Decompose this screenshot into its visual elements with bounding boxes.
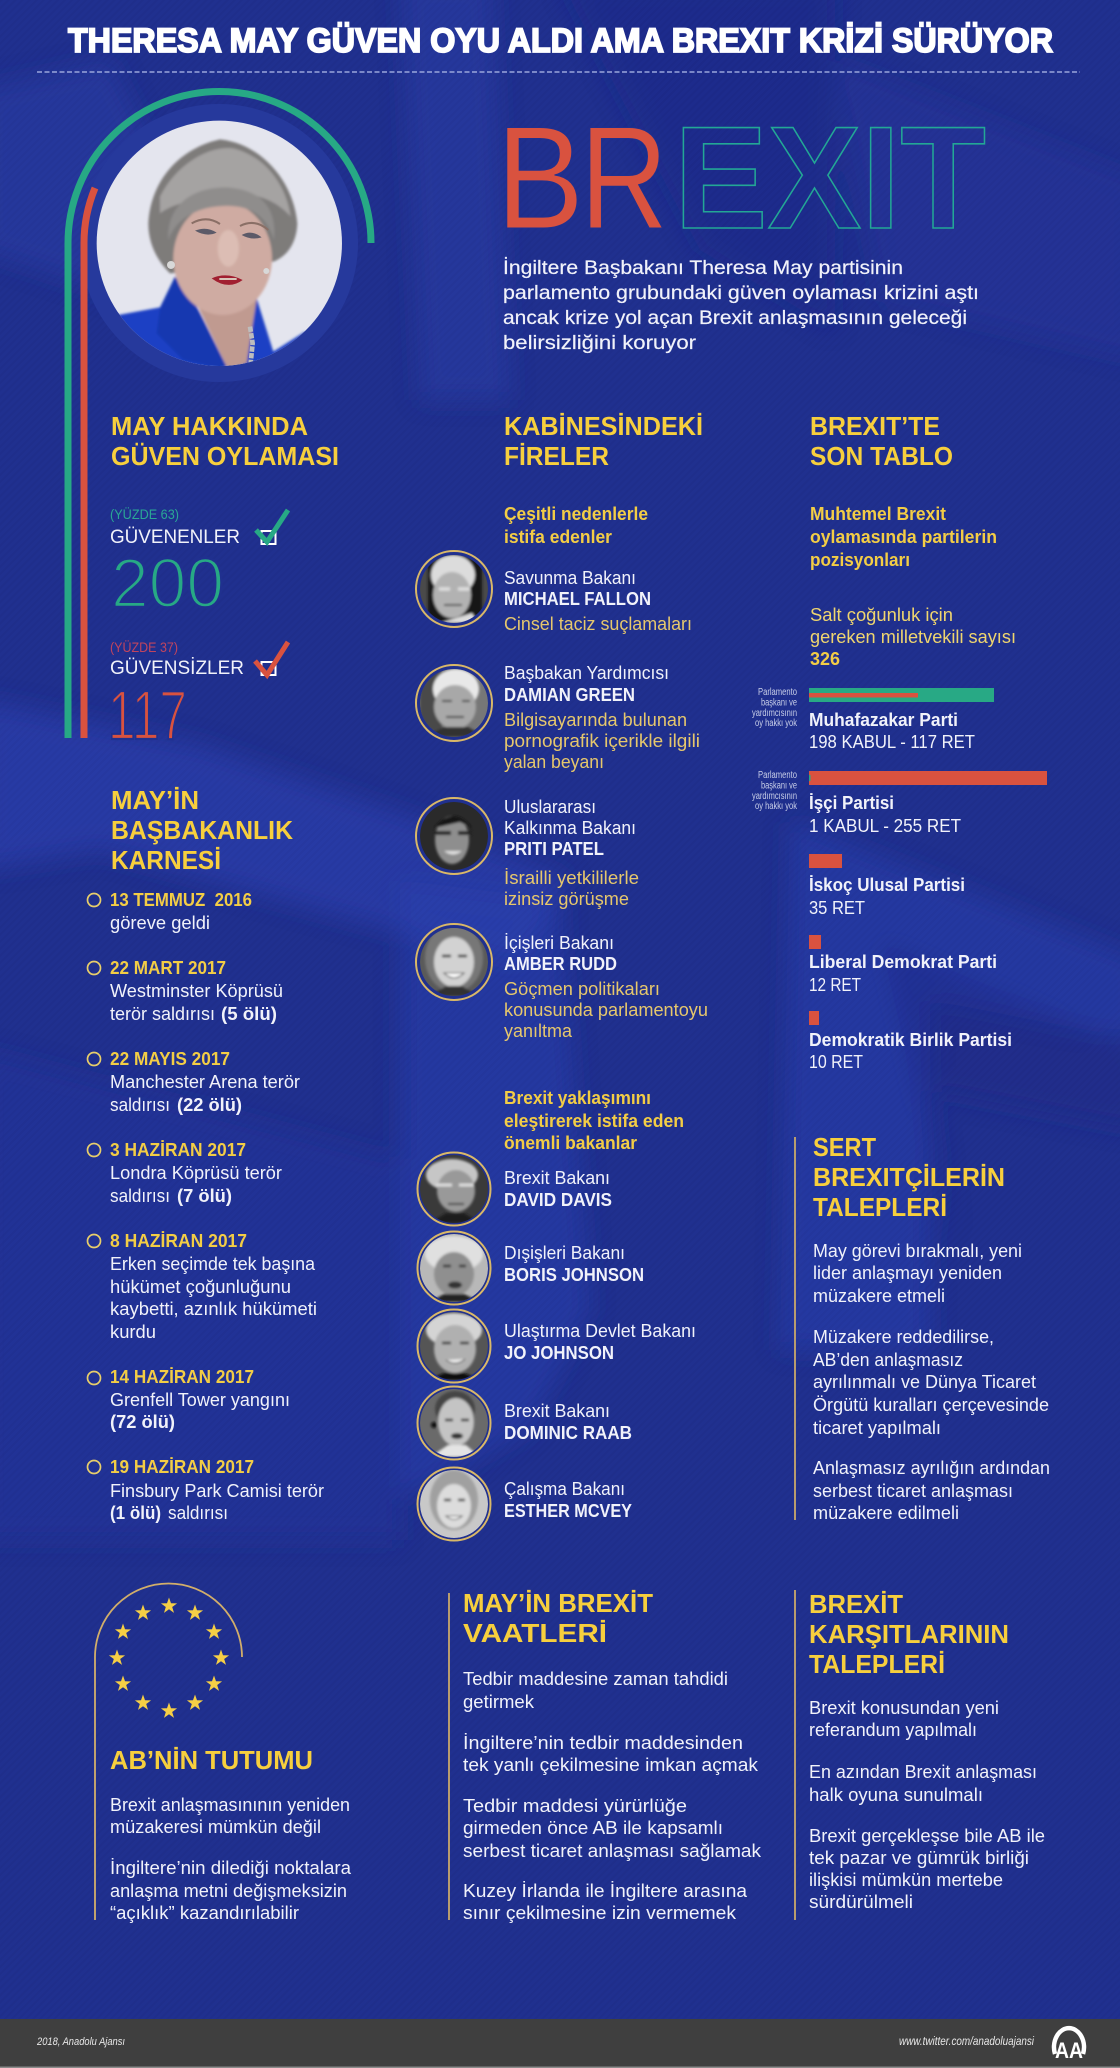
panel: Sert Brexitçilerin talepleri: Müzakere reddedilirse,: [813, 1326, 994, 1347]
panel: May'in Brexit vaatleri: getirmek: [463, 1691, 535, 1712]
timeline: 3 HAZİRAN 2017: [110, 1140, 246, 1160]
footer: 2018, Anadolu Ajansı: [36, 2036, 125, 2048]
text: Dominic Raab: [504, 1400, 632, 1443]
heading: May hakkında güven oylaması: MAY HAKKINDA: [111, 411, 308, 441]
subheading: çeşitli nedenlerle: Çeşitli nedenlerle: [504, 504, 648, 524]
panel: May'in Brexit vaatleri: tek yanlı çekilmesine imkan açmak: [463, 1754, 759, 1775]
panel: Sert Brexitçilerin talepleri: müzakere etmeli: [813, 1285, 945, 1306]
subheading: parti pozisyonları: oylamasında partilerin: [810, 527, 997, 547]
text: Michael Fallon: [504, 567, 692, 634]
text: Priti Patel: Uluslararası: [504, 796, 596, 817]
bar chart: İşçi Partisi: [809, 771, 1047, 836]
text: Damian Green: yalan beyanı: [504, 751, 604, 772]
panel: Sert Brexitçilerin talepleri: Anlaşmasız ayrılığın ardından: [813, 1457, 1050, 1478]
icon: EU stars with arch: [95, 1584, 242, 1920]
text: Jo Johnson: [504, 1320, 696, 1363]
text: Dominic Raab: DOMINIC RAAB: [504, 1422, 632, 1443]
heading: Kabinesindeki fireler: [504, 411, 703, 471]
bar chart: Muhafazakar Parti: 198 KABUL - 117 RET: [809, 731, 975, 752]
panel: May'in Brexit vaatleri: MAY’İN BREXİT: [463, 1588, 653, 1618]
panel: AB'nin tutumu: AB’NİN TUTUMU: [110, 1745, 313, 1775]
subheading: Brexit yaklaşımını: Brexit yaklaşımını: [504, 1088, 651, 1108]
timeline: 22 MART 2017: [110, 958, 226, 978]
timeline: saldırısı: [110, 1094, 170, 1115]
subheading: parti pozisyonları: pozisyonları: [810, 550, 910, 570]
panel: Brexit karşıtlarının talepleri: ilişkisi mümkün mertebe: [809, 1869, 1003, 1890]
footer: www.twitter.com/anadoluajansi: [899, 2034, 1034, 2048]
panel: Brexit karşıtlarının talepleri: [795, 1589, 1045, 1920]
panel: Sert Brexitçilerin talepleri: ayrılınmalı ve Dünya Ticaret: [813, 1371, 1036, 1392]
icon: AA logo: AA: [1055, 2038, 1083, 2063]
portrait: Amber Rudd: [416, 924, 492, 1000]
text: Boris Johnson: [504, 1242, 644, 1285]
text: Damian Green: [504, 662, 700, 772]
bar chart: İskoç Ulusal Partisi: İskoç Ulusal Partisi: [809, 874, 965, 895]
panel: Sert Brexitçilerin talepleri: TALEPLERİ: [813, 1192, 947, 1222]
subheading: Brexit yaklaşımını: önemli bakanlar: [504, 1133, 637, 1153]
heading: Brexit'te son tablo: BREXIT’TE: [810, 411, 940, 441]
note: parlamento başkanı 2: Parlamento: [758, 770, 797, 781]
text: Priti Patel: İsrailli yetkililerle: [504, 867, 639, 888]
portrait: Michael Fallon: [416, 551, 492, 627]
panel: AB'nin tutumu: “açıklık” kazandırılabilir: [110, 1902, 299, 1923]
vote panel: güvensizler: (YÜZDE 37): [110, 638, 178, 655]
text: David Davis: Brexit Bakanı: [504, 1167, 610, 1188]
timeline: kurdu: [110, 1321, 156, 1342]
bar chart: Demokratik Birlik Partisi: 10 RET: [809, 1051, 863, 1072]
timeline: Finsbury Park Camisi terör: [110, 1480, 324, 1501]
text: Amber Rudd: AMBER RUDD: [504, 953, 617, 974]
bar chart: İskoç Ulusal Partisi: 35 RET: [809, 897, 865, 918]
timeline: (5 ölü): [221, 1003, 277, 1024]
bar chart: Demokratik Birlik Partisi: [809, 1011, 1012, 1072]
bar chart: Muhafazakar Parti: [809, 688, 994, 752]
panel: Sert Brexitçilerin talepleri: ticaret yapılmalı: [813, 1417, 941, 1438]
text: David Davis: DAVID DAVIS: [504, 1189, 612, 1210]
subheading: çeşitli nedenlerle: istifa edenler: [504, 527, 612, 547]
panel: AB'nin tutumu: [110, 1745, 352, 1923]
text: Priti Patel: Kalkınma Bakanı: [504, 817, 636, 838]
bar chart: İşçi Partisi: İşçi Partisi: [809, 792, 894, 813]
timeline: hükümet çoğunluğunu: [110, 1276, 291, 1297]
subheading: parti pozisyonları: Muhtemel Brexit: [810, 504, 946, 524]
text: Amber Rudd: İçişleri Bakanı: [504, 932, 614, 953]
subheading: Brexit yaklaşımını: [504, 1088, 684, 1153]
timeline: 13 TEMMUZ 2016: [110, 890, 252, 910]
note: parlamento başkanı 2: yardımcısının: [752, 791, 797, 802]
note: parlamento başkanı 1: yardımcısının: [752, 708, 797, 719]
timeline: Westminster Köprüsü: [110, 980, 283, 1001]
timeline: Erken seçimde tek başına: [110, 1253, 316, 1274]
panel: Brexit karşıtlarının talepleri: KARŞITLARININ: [809, 1619, 1009, 1649]
majority threshold: [810, 604, 1016, 669]
timeline: Grenfell Tower yangını: [110, 1389, 290, 1410]
panel: AB'nin tutumu: müzakeresi mümkün değil: [110, 1816, 321, 1837]
panel: Brexit karşıtlarının talepleri: sürdürülmeli: [809, 1891, 913, 1912]
timeline: Manchester Arena terör: [110, 1071, 300, 1092]
panel: May'in Brexit vaatleri: girmeden önce AB ile kapsamlı: [463, 1817, 723, 1838]
heading: May'in başbakanlık karnesi: BAŞBAKANLIK: [111, 815, 293, 845]
bar chart: Demokratik Birlik Partisi: Demokratik Birlik Partisi: [809, 1029, 1012, 1050]
timeline: göreve geldi: [110, 912, 210, 933]
timeline: 8 HAZİRAN 2017: [110, 1231, 247, 1251]
panel: Brexit karşıtlarının talepleri: En azından Brexit anlaşması: [809, 1761, 1037, 1782]
portrait: Damian Green: [416, 665, 492, 741]
bar chart: Muhafazakar Parti: Muhafazakar Parti: [809, 709, 958, 730]
bar chart: İskoç Ulusal Partisi: [809, 854, 965, 918]
heading: May'in başbakanlık karnesi: MAY’İN: [111, 785, 199, 815]
panel: Brexit karşıtlarının talepleri: halk oyuna sunulmalı: [809, 1784, 983, 1805]
panel: Brexit karşıtlarının talepleri: tek pazar ve gümrük birliği: [809, 1847, 1029, 1868]
timeline: (22 ölü): [177, 1094, 242, 1115]
decorative arcs and portrait: Theresa May: [68, 92, 371, 738]
text: Priti Patel: [504, 796, 639, 909]
text: Boris Johnson: BORIS JOHNSON: [504, 1264, 644, 1285]
panel: Sert Brexitçilerin talepleri: AB’den anlaşmasız: [813, 1349, 963, 1370]
text: Amber Rudd: [504, 932, 708, 1041]
text: Esther McVey: ESTHER MCVEY: [504, 1500, 633, 1521]
bar chart: Liberal Demokrat Parti: Liberal Demokrat Parti: [809, 951, 997, 972]
timeline: 19 HAZİRAN 2017: [110, 1457, 254, 1477]
timeline: 14 HAZİRAN 2017: [110, 1367, 254, 1387]
portrait: Jo Johnson: [418, 1310, 490, 1382]
vote panel: güvenenler: [110, 505, 288, 622]
portrait: Esther McVey: [418, 1468, 490, 1540]
panel: Sert Brexitçilerin talepleri: lider anlaşmayı yeniden: [813, 1262, 1002, 1283]
subheading: Brexit yaklaşımını: eleştirerek istifa eden: [504, 1111, 684, 1131]
text: Michael Fallon: MICHAEL FALLON: [504, 588, 651, 609]
heading: Kabinesindeki fireler: KABİNESİNDEKİ: [504, 411, 703, 441]
panel: May'in Brexit vaatleri: Tedbir maddesi yürürlüğe: [463, 1795, 687, 1816]
text: Priti Patel: izinsiz görüşme: [504, 888, 629, 909]
text: Dominic Raab: Brexit Bakanı: [504, 1400, 610, 1421]
panel: May'in Brexit vaatleri: Kuzey İrlanda ile İngiltere arasına: [463, 1880, 748, 1901]
timeline: Londra Köprüsü terör: [110, 1162, 282, 1183]
panel: May'in Brexit vaatleri: sınır çekilmesine izin vermemek: [463, 1902, 737, 1923]
timeline: (72 ölü): [110, 1411, 175, 1432]
portrait: Priti Patel: [416, 798, 492, 874]
vote panel: güvenenler: 200: [111, 544, 224, 622]
vote panel: güvensizler: [108, 638, 288, 754]
panel: AB'nin tutumu: Brexit anlaşmasınının yeniden: [110, 1794, 350, 1815]
panel: Brexit karşıtlarının talepleri: BREXİT: [809, 1589, 903, 1619]
timeline: saldırısı: [110, 1185, 170, 1206]
panel: Brexit karşıtlarının talepleri: TALEPLERİ: [809, 1649, 945, 1679]
majority threshold: Salt çoğunluk için: [810, 604, 953, 625]
panel: AB'nin tutumu: İngiltere’nin dilediği noktalara: [110, 1857, 352, 1878]
text: Damian Green: Başbakan Yardımcısı: [504, 662, 669, 683]
panel: May'in Brexit vaatleri: İngiltere’nin tedbir maddesinden: [463, 1732, 743, 1753]
panel: Sert Brexitçilerin talepleri: Örgütü kuralları çerçevesinde: [813, 1394, 1049, 1415]
timeline: (1 ölü): [110, 1502, 161, 1523]
heading: Brexit'te son tablo: SON TABLO: [810, 441, 953, 471]
timeline: 22 MAYIS 2017: [110, 1049, 230, 1069]
timeline: kaybetti, azınlık hükümeti: [110, 1298, 317, 1319]
note: parlamento başkanı 1: oy hakkı yok: [755, 718, 798, 729]
text: Esther McVey: Çalışma Bakanı: [504, 1478, 625, 1499]
timeline: terör saldırısı: [110, 1003, 215, 1024]
note: parlamento başkanı 2: [752, 770, 798, 812]
text: Michael Fallon: Cinsel taciz suçlamaları: [504, 613, 692, 634]
subheading: çeşitli nedenlerle: [504, 504, 648, 547]
title: THERESA MAY GÜVEN OYU ALDI AMA BREXIT KRİZİ SÜRÜYOR: [68, 22, 1053, 60]
timeline: saldırısı: [168, 1502, 228, 1523]
panel: Sert Brexitçilerin talepleri: BREXITÇİLERİN: [813, 1162, 1005, 1192]
heading: May'in başbakanlık karnesi: KARNESİ: [111, 845, 221, 875]
portrait: David Davis: [418, 1152, 490, 1226]
panel: Sert Brexitçilerin talepleri: May görevi bırakmalı, yeni: [813, 1240, 1022, 1261]
text: Priti Patel: PRITI PATEL: [504, 838, 604, 859]
footer: [0, 2019, 1120, 2068]
intro text: parlamento grubundaki güven oylaması krizini aştı: [503, 282, 979, 304]
icon: AA logo: [1054, 2028, 1084, 2063]
BREXIT wordmark: [496, 96, 986, 259]
panel: Brexit karşıtlarının talepleri: Brexit konusundan yeni: [809, 1697, 999, 1718]
panel: May'in Brexit vaatleri: serbest ticaret anlaşması sağlamak: [463, 1840, 762, 1861]
text: Damian Green: Bilgisayarında bulunan: [504, 709, 687, 730]
panel: Sert Brexitçilerin talepleri: [795, 1132, 1050, 1523]
panel: Sert Brexitçilerin talepleri: serbest ticaret anlaşması: [813, 1480, 1013, 1501]
panel: May'in Brexit vaatleri: VAATLERİ: [463, 1618, 607, 1648]
text: David Davis: [504, 1167, 612, 1210]
timeline: [88, 890, 324, 1523]
panel: Sert Brexitçilerin talepleri: müzakere edilmeli: [813, 1502, 959, 1523]
timeline: (7 ölü): [177, 1185, 232, 1206]
BREXIT wordmark: B: [496, 96, 584, 259]
text: Damian Green: pornografik içerikle ilgili: [504, 730, 700, 751]
panel: Brexit karşıtlarının talepleri: Brexit gerçekleşse bile AB ile: [809, 1825, 1045, 1846]
intro text: ancak krize yol açan Brexit anlaşmasının geleceği: [503, 307, 967, 329]
BREXIT wordmark: R: [580, 96, 668, 259]
bar chart: Liberal Demokrat Parti: 12 RET: [809, 974, 861, 995]
heading: May'in başbakanlık karnesi: [111, 785, 293, 875]
majority threshold: 326: [810, 649, 840, 669]
panel: AB'nin tutumu: anlaşma metni değişmeksizin: [110, 1880, 347, 1901]
heading: Kabinesindeki fireler: FİRELER: [504, 441, 609, 471]
vote panel: güvensizler: 117: [108, 676, 187, 754]
text: Amber Rudd: Göçmen politikaları: [504, 978, 660, 999]
portrait: Dominic Raab: [418, 1386, 490, 1460]
vote panel: güvenenler: (YÜZDE 63): [110, 505, 179, 522]
note: parlamento başkanı 1: Parlamento: [758, 687, 797, 698]
vote panel: güvensizler: GÜVENSİZLER: [110, 656, 244, 679]
intro text: [503, 256, 979, 354]
vote panel: güvenenler: GÜVENENLER: [110, 526, 240, 548]
portrait: Boris Johnson: [418, 1232, 490, 1304]
text: Jo Johnson: Ulaştırma Devlet Bakanı: [504, 1320, 696, 1341]
bar chart: Liberal Demokrat Parti: [809, 935, 997, 995]
intro text: belirsizliğini koruyor: [503, 332, 697, 354]
heading: May hakkında güven oylaması: [111, 411, 339, 471]
note: parlamento başkanı 1: başkanı ve: [761, 698, 797, 708]
heading: May hakkında güven oylaması: GÜVEN OYLAMASI: [111, 441, 339, 471]
text: Boris Johnson: Dışişleri Bakanı: [504, 1242, 625, 1263]
bar chart: İşçi Partisi: 1 KABUL - 255 RET: [809, 815, 961, 836]
panel: May'in Brexit vaatleri: Tedbir maddesine zaman tahdidi: [463, 1668, 728, 1689]
subheading: parti pozisyonları: [810, 504, 997, 570]
majority threshold: gereken milletvekili sayısı: [810, 626, 1016, 647]
note: parlamento başkanı 1: [752, 687, 798, 729]
panel: Sert Brexitçilerin talepleri: SERT: [813, 1132, 876, 1162]
panel: May'in Brexit vaatleri: [449, 1588, 762, 1923]
panel: Brexit karşıtlarının talepleri: referandum yapılmalı: [809, 1719, 977, 1740]
intro text: İngiltere Başbakanı Theresa May partisinin: [503, 256, 903, 279]
BREXIT wordmark: EXIT: [674, 96, 986, 259]
text: Esther McVey: [504, 1478, 633, 1521]
text: Amber Rudd: yanıltma: [504, 1020, 573, 1041]
text: Amber Rudd: konusunda parlamentoyu: [504, 999, 708, 1020]
text: Damian Green: DAMIAN GREEN: [504, 684, 635, 705]
text: Michael Fallon: Savunma Bakanı: [504, 567, 636, 588]
note: parlamento başkanı 2: başkanı ve: [761, 780, 797, 792]
heading: Brexit'te son tablo: [810, 411, 953, 471]
note: parlamento başkanı 2: oy hakkı yok: [755, 801, 798, 812]
text: Jo Johnson: JO JOHNSON: [504, 1342, 614, 1363]
